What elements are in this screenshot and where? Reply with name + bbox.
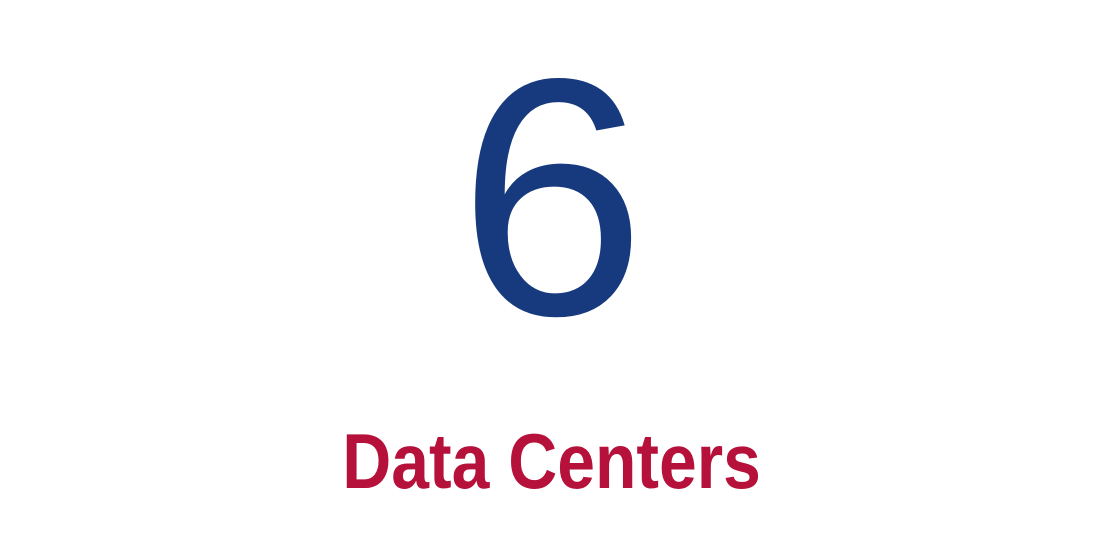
- label: Data Centers: Data Centers: [343, 417, 761, 505]
- big number: 6: [458, 8, 646, 386]
